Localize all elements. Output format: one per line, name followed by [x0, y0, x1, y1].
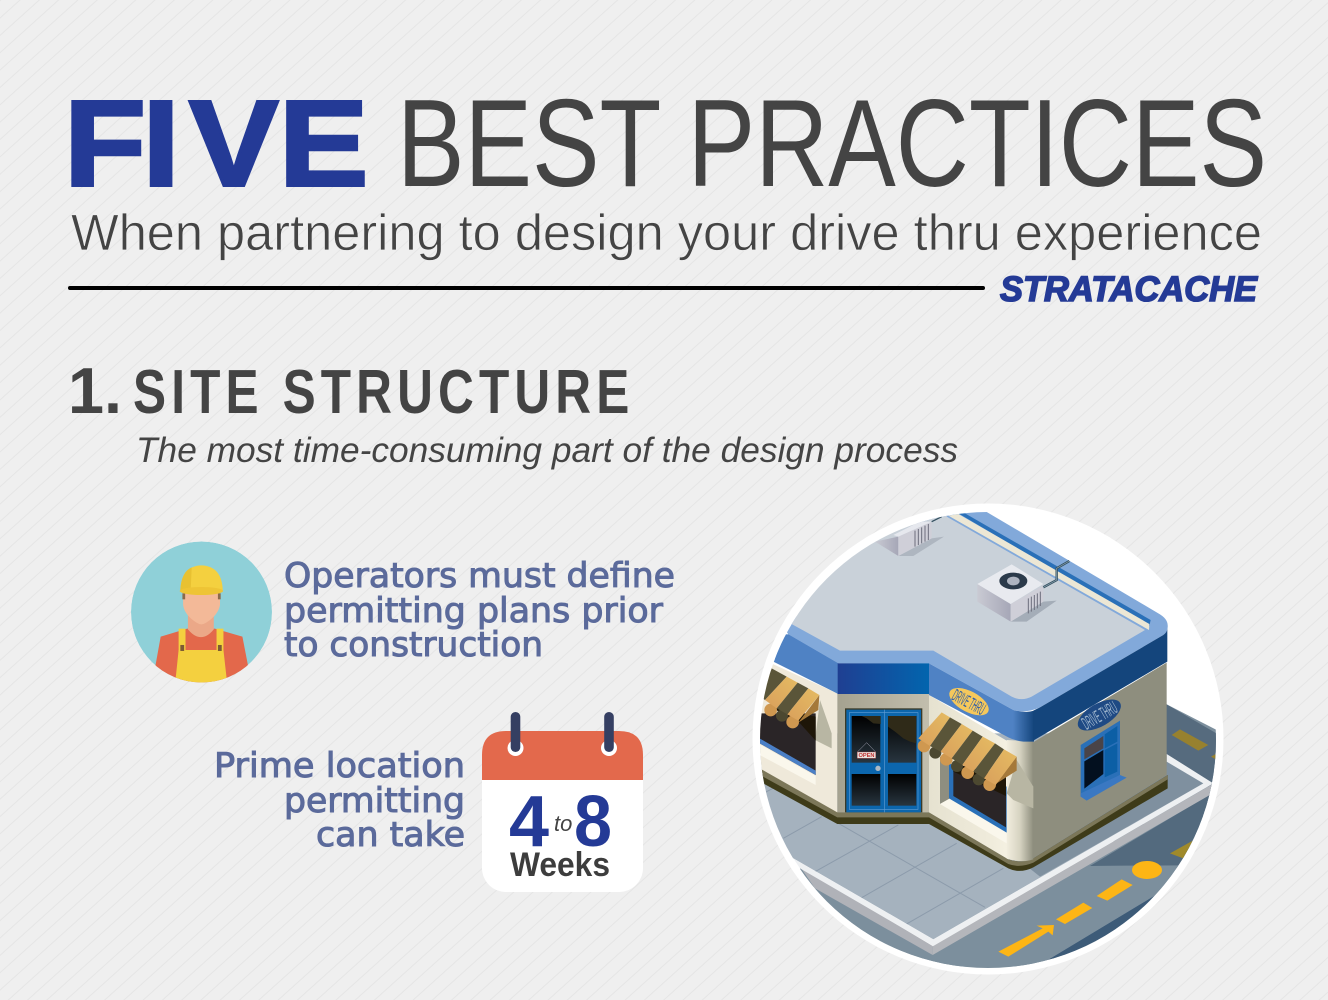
- roof: [792, 516, 1145, 700]
- title: [64, 75, 1267, 213]
- sidewalk and curb: [750, 733, 1213, 955]
- text: prime location permitting can take: can take: [316, 815, 465, 855]
- center awning: [918, 712, 1017, 791]
- text: prime location permitting can take: Prime location: [214, 746, 465, 786]
- icon: calendar 4 to 8 weeks: [482, 712, 643, 892]
- icon: construction worker: [131, 542, 272, 690]
- sign: drive thru on front fascia: [949, 688, 989, 716]
- open sign: OPEN: [858, 753, 875, 759]
- center window with awning: [940, 757, 1033, 843]
- calendar number 4: 4: [509, 782, 549, 862]
- section tagline: The most time-consuming part of the design process: [136, 431, 958, 470]
- left window with awning: [757, 668, 832, 785]
- roof rim and fascia: [757, 510, 1168, 742]
- rooftop unit rear: [875, 517, 944, 556]
- illustration: isometric drive thru building in white circle: [750, 500, 1224, 1000]
- text: prime location permitting can take: permitting: [284, 781, 465, 821]
- subtitle: When partnering to design your drive thru experience: [71, 204, 1262, 261]
- text: operators must define permitting plans: Operators must define: [284, 556, 675, 596]
- text: operators must define permitting plans: to construction: [284, 625, 543, 665]
- calendar word weeks: Weeks: [510, 846, 610, 884]
- logo: STRATACACHE: STRATACACHE: [1000, 270, 1259, 309]
- calendar word to: to: [554, 811, 572, 836]
- title word: FIVE: FIVE: [64, 76, 368, 212]
- calendar number 8: 8: [574, 782, 612, 862]
- rooftop unit front: [977, 561, 1069, 622]
- door: [845, 708, 922, 812]
- section title: SITE STRUCTURE: [133, 357, 634, 426]
- building plinth: [760, 768, 1168, 871]
- text: operators must define permitting plans: [284, 556, 675, 665]
- building walls: [757, 657, 1167, 861]
- road: [800, 704, 1216, 968]
- divider rule: [68, 286, 985, 290]
- sign: drive thru on side fascia: [1078, 700, 1121, 730]
- text: prime location permitting can take: [214, 746, 465, 855]
- text: operators must define permitting plans: permitting plans prior: [284, 591, 663, 631]
- section heading: [68, 354, 634, 427]
- illustration: isometric drive thru building in white circle: DRIVE THRU: [1078, 697, 1121, 734]
- section number: 1.: [68, 354, 122, 427]
- right wall window: [1081, 721, 1127, 801]
- illustration: isometric drive thru building in white circle: DRIVE THRU: [949, 685, 989, 719]
